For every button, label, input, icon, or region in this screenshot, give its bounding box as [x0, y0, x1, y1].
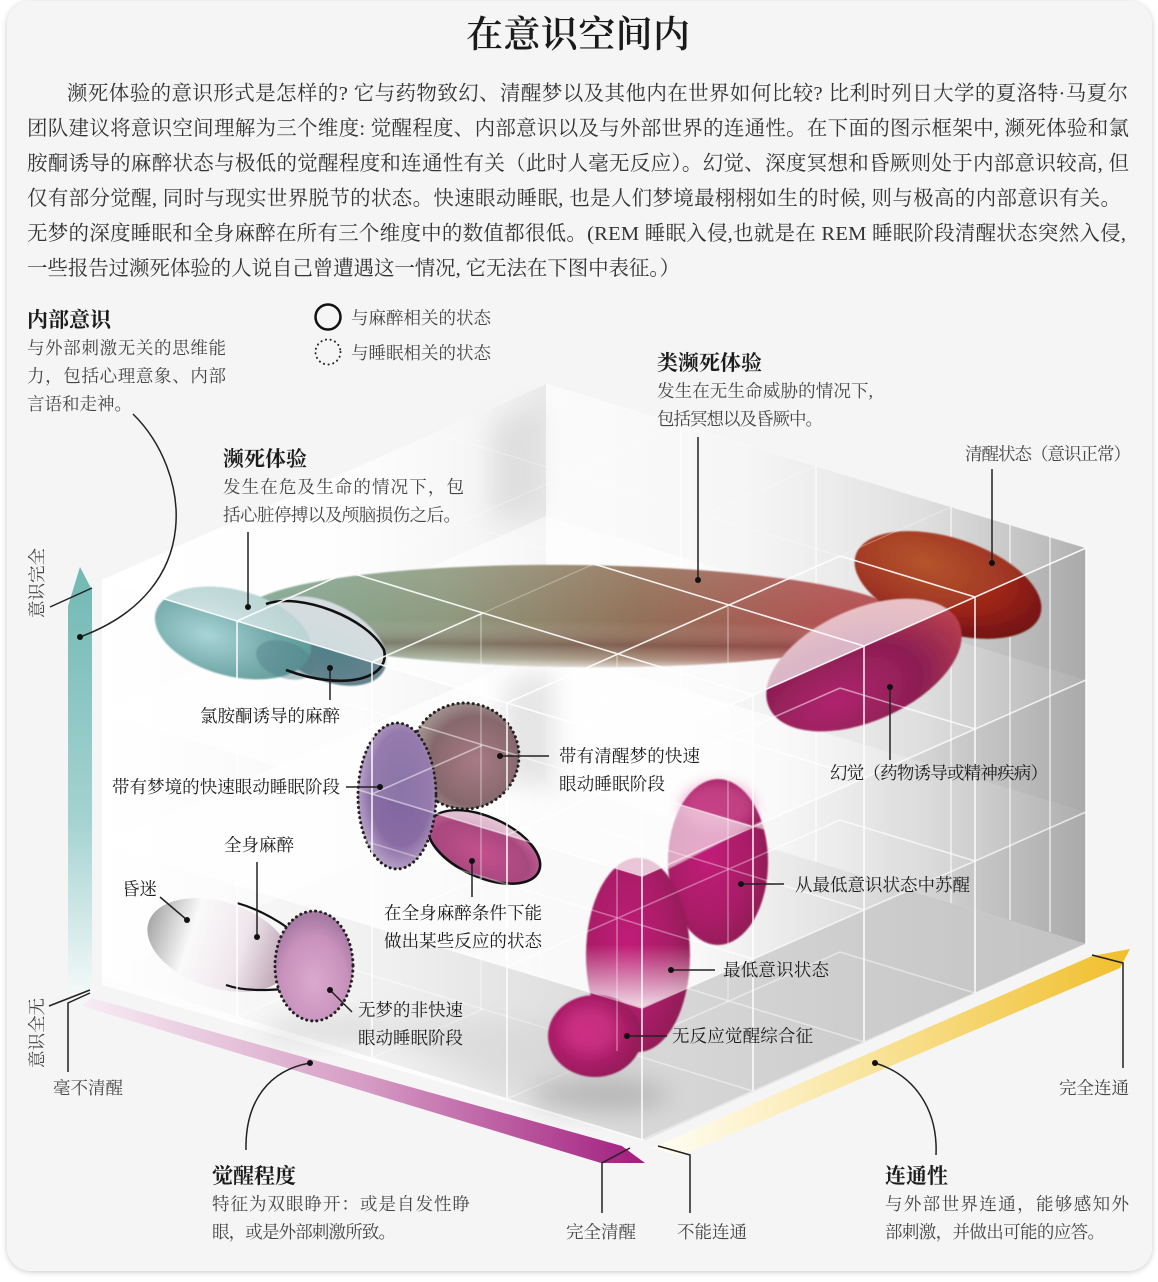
- axis end label: full awareness: 意识完全: [27, 548, 47, 618]
- axis heading: internal awareness: 与外部刺激无关的思维能: [27, 338, 226, 358]
- axis heading: internal awareness: 言语和走神。: [27, 394, 132, 414]
- glass grid lines: [102, 384, 1086, 1140]
- state: emergence from minimally conscious state ellipsoid: [668, 779, 768, 945]
- axis end label: not connected: 不能连通: [677, 1222, 747, 1242]
- label: near-death experience: 濒死体验: [223, 447, 307, 471]
- state: dreaming REM sleep ellipsoid: [358, 723, 436, 869]
- intro paragraph: 一些报告过濒死体验的人说自己曾遭遇这一情况, 它无法在下图中表征。）: [27, 256, 680, 280]
- label: near-death-like experience: 包括冥想以及昏厥中。: [657, 409, 823, 429]
- axis end label: no awareness: 意识全无: [27, 998, 47, 1068]
- label: near-death experience: 括心脏停搏以及颅脑损伤之后。: [223, 505, 461, 525]
- label: hallucination: [830, 684, 1048, 783]
- intro paragraph: 胺酮诱导的麻醉状态与极低的觉醒程度和连通性有关（此时人毫无反应）。幻觉、深度冥想和昏厥则处于内部意识较高, 但: [27, 152, 1129, 175]
- 3D consciousness space box: [102, 384, 1086, 1140]
- label: wakefulness: [965, 444, 1131, 566]
- axis heading: connectedness: 部刺激，并做出可能的应答。: [885, 1222, 1105, 1242]
- axis arrow: internal awareness: [68, 567, 92, 990]
- axis end label: not connected: [658, 1146, 747, 1242]
- intro paragraph: 濒死体验的意识形式是怎样的? 它与药物致幻、清醒梦以及其他内在世界如何比较? 比利时列日大学的夏洛特·马夏尔: [67, 82, 1128, 105]
- label: ketamine: [200, 665, 340, 726]
- label: unresponsive wakefulness: 无反应觉醒综合征: [672, 1026, 814, 1046]
- legend: [316, 304, 491, 364]
- intro paragraph: 无梦的深度睡眠和全身麻醉在所有三个维度中的数值都很低。(REM 睡眠入侵,也就是在 REM 睡眠阶段清醒状态突然入侵,: [27, 222, 1126, 245]
- axis heading: internal awareness: 内部意识: [27, 308, 113, 332]
- label: lucid REM: 眼动睡眠阶段: [559, 774, 666, 794]
- state: near-death-like experience ellipsoid: [244, 562, 906, 670]
- axis heading: connectedness: 连通性: [885, 1164, 948, 1188]
- axis end label: fully awake: 完全清醒: [566, 1222, 636, 1242]
- label: responsive under anesthesia: 在全身麻醉条件下能: [384, 903, 542, 923]
- label: wakefulness: 清醒状态（意识正常）: [965, 444, 1131, 464]
- axis heading: wakefulness: 眼，或是外部刺激所致。: [212, 1222, 396, 1242]
- label: general anesthesia: 全身麻醉: [224, 835, 294, 855]
- state: dreamless NREM sleep ellipsoid: [275, 911, 353, 1021]
- axis heading: wakefulness: [212, 1060, 470, 1242]
- label: near-death-like experience: 发生在无生命威胁的情况下,: [657, 381, 873, 401]
- leader: internal awareness arc: [77, 414, 176, 640]
- label: near-death-like experience: [657, 351, 873, 583]
- state: coma and general anesthesia ellipsoid: [135, 881, 303, 1009]
- legend: 与睡眠相关的状态: [351, 343, 491, 363]
- label: lucid REM: [497, 746, 700, 794]
- label: ketamine: 氯胺酮诱导的麻醉: [200, 706, 340, 726]
- label: dreamless NREM: 眼动睡眠阶段: [358, 1028, 464, 1048]
- label: minimally conscious state: [668, 960, 830, 980]
- axis end label: fully connected: [1059, 955, 1129, 1098]
- axis heading: connectedness: [872, 1060, 1130, 1242]
- state: lucid REM sleep ellipsoid: [411, 703, 519, 809]
- label: general anesthesia: [224, 835, 294, 940]
- axis arrow: connectedness: [652, 949, 1130, 1156]
- state: responsive under anesthesia ellipsoid: [428, 809, 542, 885]
- intro paragraph: 团队建议将意识空间理解为三个维度: 觉醒程度、内部意识以及与外部世界的连通性。在下面的图示框架中, 濒死体验和氯: [27, 117, 1129, 140]
- label: coma: [122, 879, 190, 923]
- label: responsive under anesthesia: 做出某些反应的状态: [384, 931, 542, 951]
- axis arrow: wakefulness: [82, 998, 645, 1163]
- label: hallucination: 幻觉（药物诱导或精神疾病）: [830, 763, 1048, 783]
- state: ketamine anesthesia ellipsoid: [274, 596, 388, 687]
- label: dreamless NREM: [327, 987, 464, 1048]
- axis heading: internal awareness: 力，包括心理意象、内部: [27, 366, 226, 386]
- state: wakefulness ellipsoid: [854, 530, 1042, 640]
- label: near-death experience: [223, 447, 464, 610]
- intro paragraph: 仅有部分觉醒, 同时与现实世界脱节的状态。快速眼动睡眠, 也是人们梦境最栩栩如生的时候, 则与极高的内部意识有关。: [27, 187, 1121, 210]
- state: hallucination ellipsoid: [765, 598, 962, 732]
- state: unresponsive wakefulness ellipsoid: [548, 995, 642, 1077]
- axis end label: no awareness: [27, 990, 90, 1072]
- axis end label: fully awake: [566, 1148, 636, 1242]
- label: lucid REM: 带有清醒梦的快速: [559, 746, 700, 766]
- anesthesia outline for ketamine: [266, 601, 385, 681]
- axis end label: fully connected: 完全连通: [1059, 1078, 1129, 1098]
- state: minimally conscious state ellipsoid: [586, 858, 690, 1052]
- legend: 与麻醉相关的状态: [351, 308, 491, 328]
- axis end label: full awareness: [27, 548, 92, 618]
- label: not awake: 毫不清醒: [53, 1078, 123, 1098]
- label: near-death-like experience: 类濒死体验: [657, 351, 762, 375]
- label: responsive under anesthesia: [384, 858, 542, 951]
- label: dreamless NREM: 无梦的非快速: [358, 1000, 464, 1020]
- label: minimally conscious state: 最低意识状态: [723, 960, 830, 980]
- intro paragraph: [27, 82, 1129, 280]
- axis heading: internal awareness: [27, 308, 226, 414]
- label: emergence from MCS: 从最低意识状态中苏醒: [795, 875, 970, 895]
- label: coma: 昏迷: [122, 879, 157, 899]
- title: 在意识空间内: [466, 14, 690, 56]
- axis heading: wakefulness: 特征为双眼睁开：或是自发性睁: [212, 1194, 470, 1214]
- label: dreaming REM: 带有梦境的快速眼动睡眠阶段: [112, 777, 340, 797]
- label: near-death experience: 发生在危及生命的情况下，包: [223, 477, 464, 497]
- axis heading: wakefulness: 觉醒程度: [212, 1164, 296, 1188]
- state: near-death experience ellipsoid: [154, 586, 312, 680]
- axis heading: connectedness: 与外部世界连通，能够感知外: [885, 1194, 1130, 1214]
